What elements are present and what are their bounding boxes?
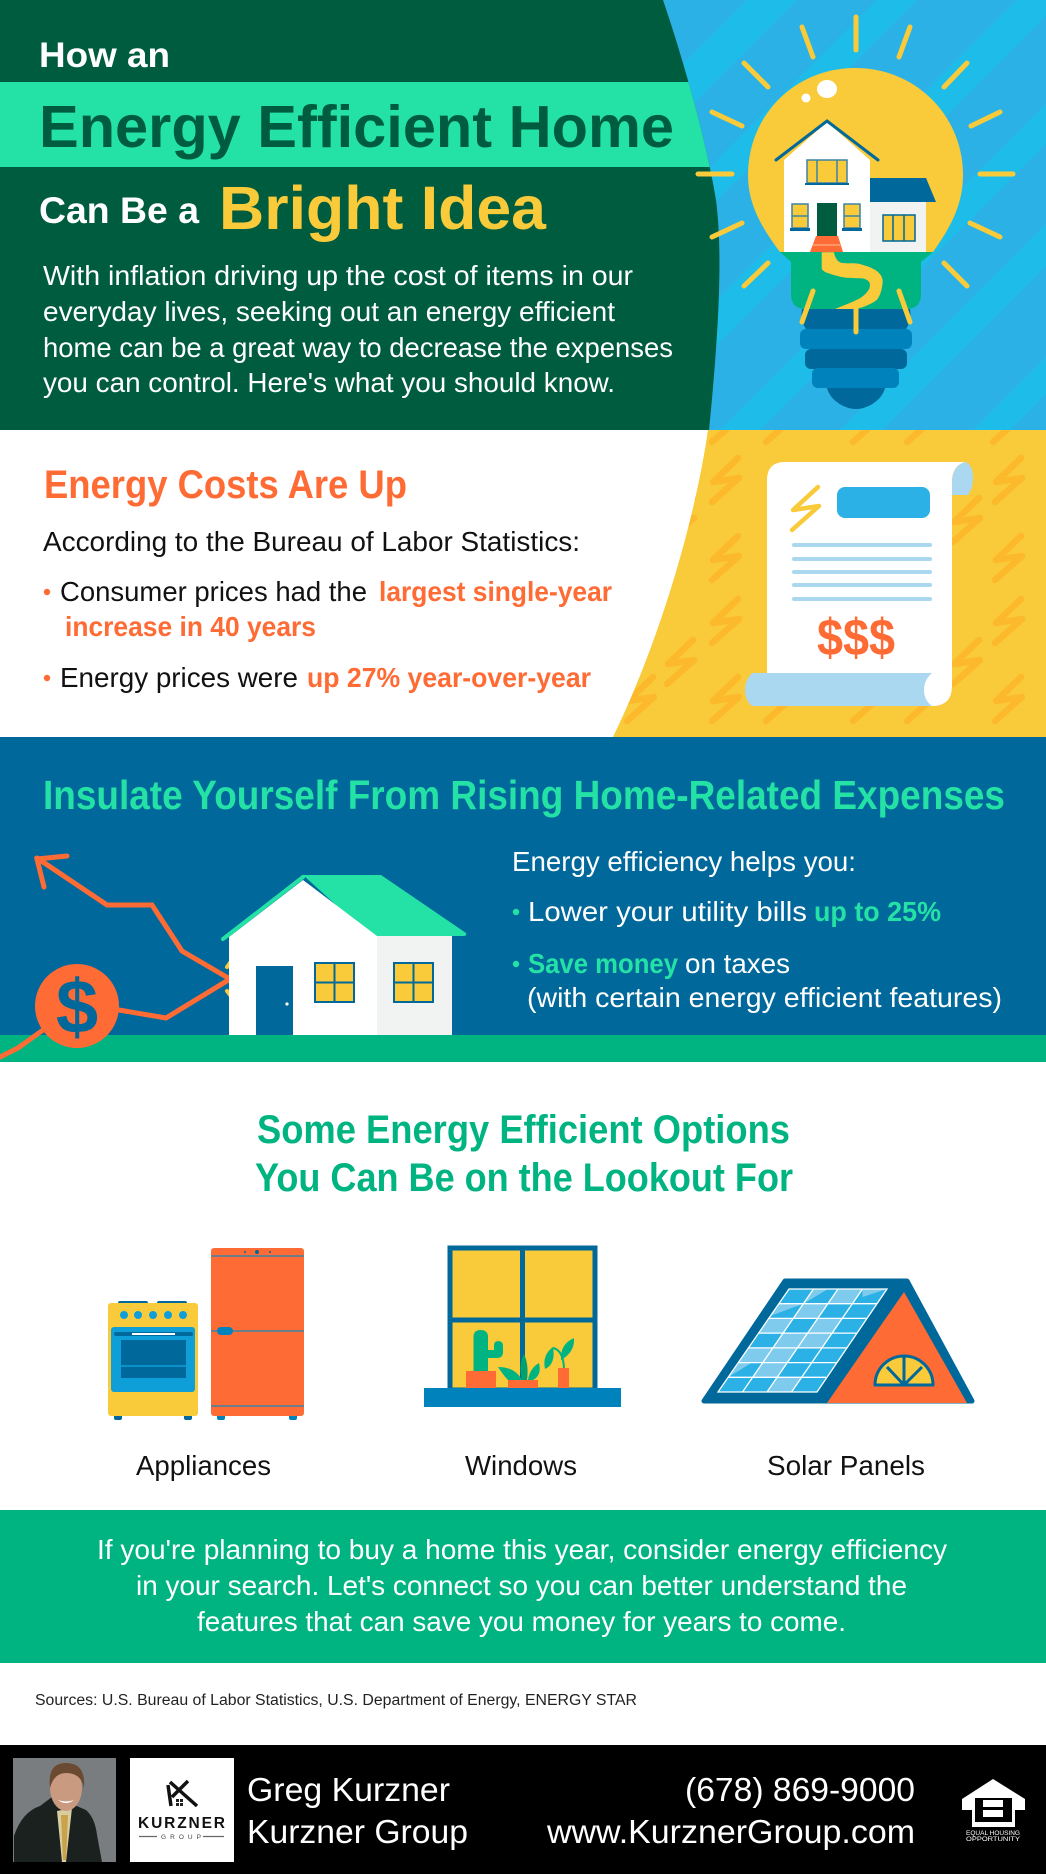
text block: energy costs statistics [43,526,612,693]
company logo [130,1758,234,1862]
text block: energy efficiency benefits: Lower your utility bills [528,896,807,927]
panel: energy costs background [613,430,1046,737]
icon: equal housing opportunity: OPPORTUNITY [966,1836,1021,1843]
text block: energy costs statistics: Consumer prices had the [60,576,367,607]
panel: insulate background [0,737,1046,1062]
icon: appliances [108,1248,304,1420]
text block: intro: you can control. Here's what you should know. [43,367,615,398]
chart: rising cost arrow with dollar coin: $ [56,965,98,1050]
text block: intro [43,260,673,398]
icon: energy bill: $$$ [817,609,895,667]
contact details: (678) 869-9000 [685,1772,915,1809]
text block: energy costs statistics: largest single-year [379,576,612,607]
icon: equal housing opportunity: EQUAL HOUSING [966,1830,1020,1837]
contact details: www.KurznerGroup.com [546,1814,915,1851]
text block: energy costs statistics: According to the Bureau of Labor Statistics: [43,526,580,557]
text block: intro: home can be a great way to decrease the expenses [43,332,673,363]
panel: call to action: in your search. Let's connect so you can better understand the [136,1570,907,1601]
label: solar panels: Solar Panels [767,1450,925,1481]
title: Can Be a [39,190,199,231]
chart: rising cost arrow with dollar coin [0,856,257,1057]
agent name: Greg Kurzner [247,1772,450,1809]
title [39,36,674,242]
icon: solar panel roof [704,1281,972,1403]
title: Bright Idea [219,174,547,242]
heading: energy efficient options: Some Energy Efficient Options [257,1108,790,1152]
text block: energy efficiency benefits: on taxes [685,948,790,979]
panel: call to action: If you're planning to buy a home this year, consider energy efficiency [97,1534,947,1565]
agent name [247,1772,468,1851]
text block: energy efficiency benefits: Energy efficiency helps you: [512,846,856,877]
icon: light bulb with house [698,17,1013,409]
icon: equal housing opportunity [962,1779,1025,1843]
panel: header background [0,0,1046,430]
text block: energy efficiency benefits: up to 25% [814,896,941,927]
text block: energy efficiency benefits: Save money [528,948,678,979]
text block: energy efficiency benefits [512,846,1002,1013]
agent name: Kurzner Group [247,1814,468,1851]
text block: energy costs statistics: up 27% year-over-year [307,662,591,693]
icon: energy bill [745,462,973,706]
text block: energy costs statistics: Energy prices were [60,662,298,693]
heading: energy efficient options: You Can Be on the Lookout For [255,1156,793,1200]
company logo: GROUP [161,1834,201,1841]
panel: footer [0,1745,1046,1874]
heading: energy efficient options [255,1108,793,1200]
contact details [546,1772,915,1851]
company logo: KURZNER [138,1815,225,1832]
label: appliances: Appliances [136,1450,271,1481]
label: windows: Windows [465,1450,577,1481]
heading: energy costs: Energy Costs Are Up [44,463,407,507]
text block: sources: Sources: U.S. Bureau of Labor Statistics, U.S. Department of Energy, ENERGY STAR [35,1692,637,1709]
text block: energy efficiency benefits: (with certain energy efficient features) [527,982,1002,1013]
panel: call to action: features that can save you money for years to come. [197,1606,846,1637]
text block: intro: With inflation driving up the cost of items in our [43,260,633,291]
text block: energy costs statistics: increase in 40 years [65,611,316,642]
icon: window with plants [424,1248,621,1407]
text block: intro: everyday lives, seeking out an energy efficient [43,296,615,327]
agent photo [13,1758,116,1862]
panel: call to action [0,1510,1046,1663]
title: How an [39,36,170,75]
title: Energy Efficient Home [39,94,674,160]
icon: house [223,875,466,1035]
